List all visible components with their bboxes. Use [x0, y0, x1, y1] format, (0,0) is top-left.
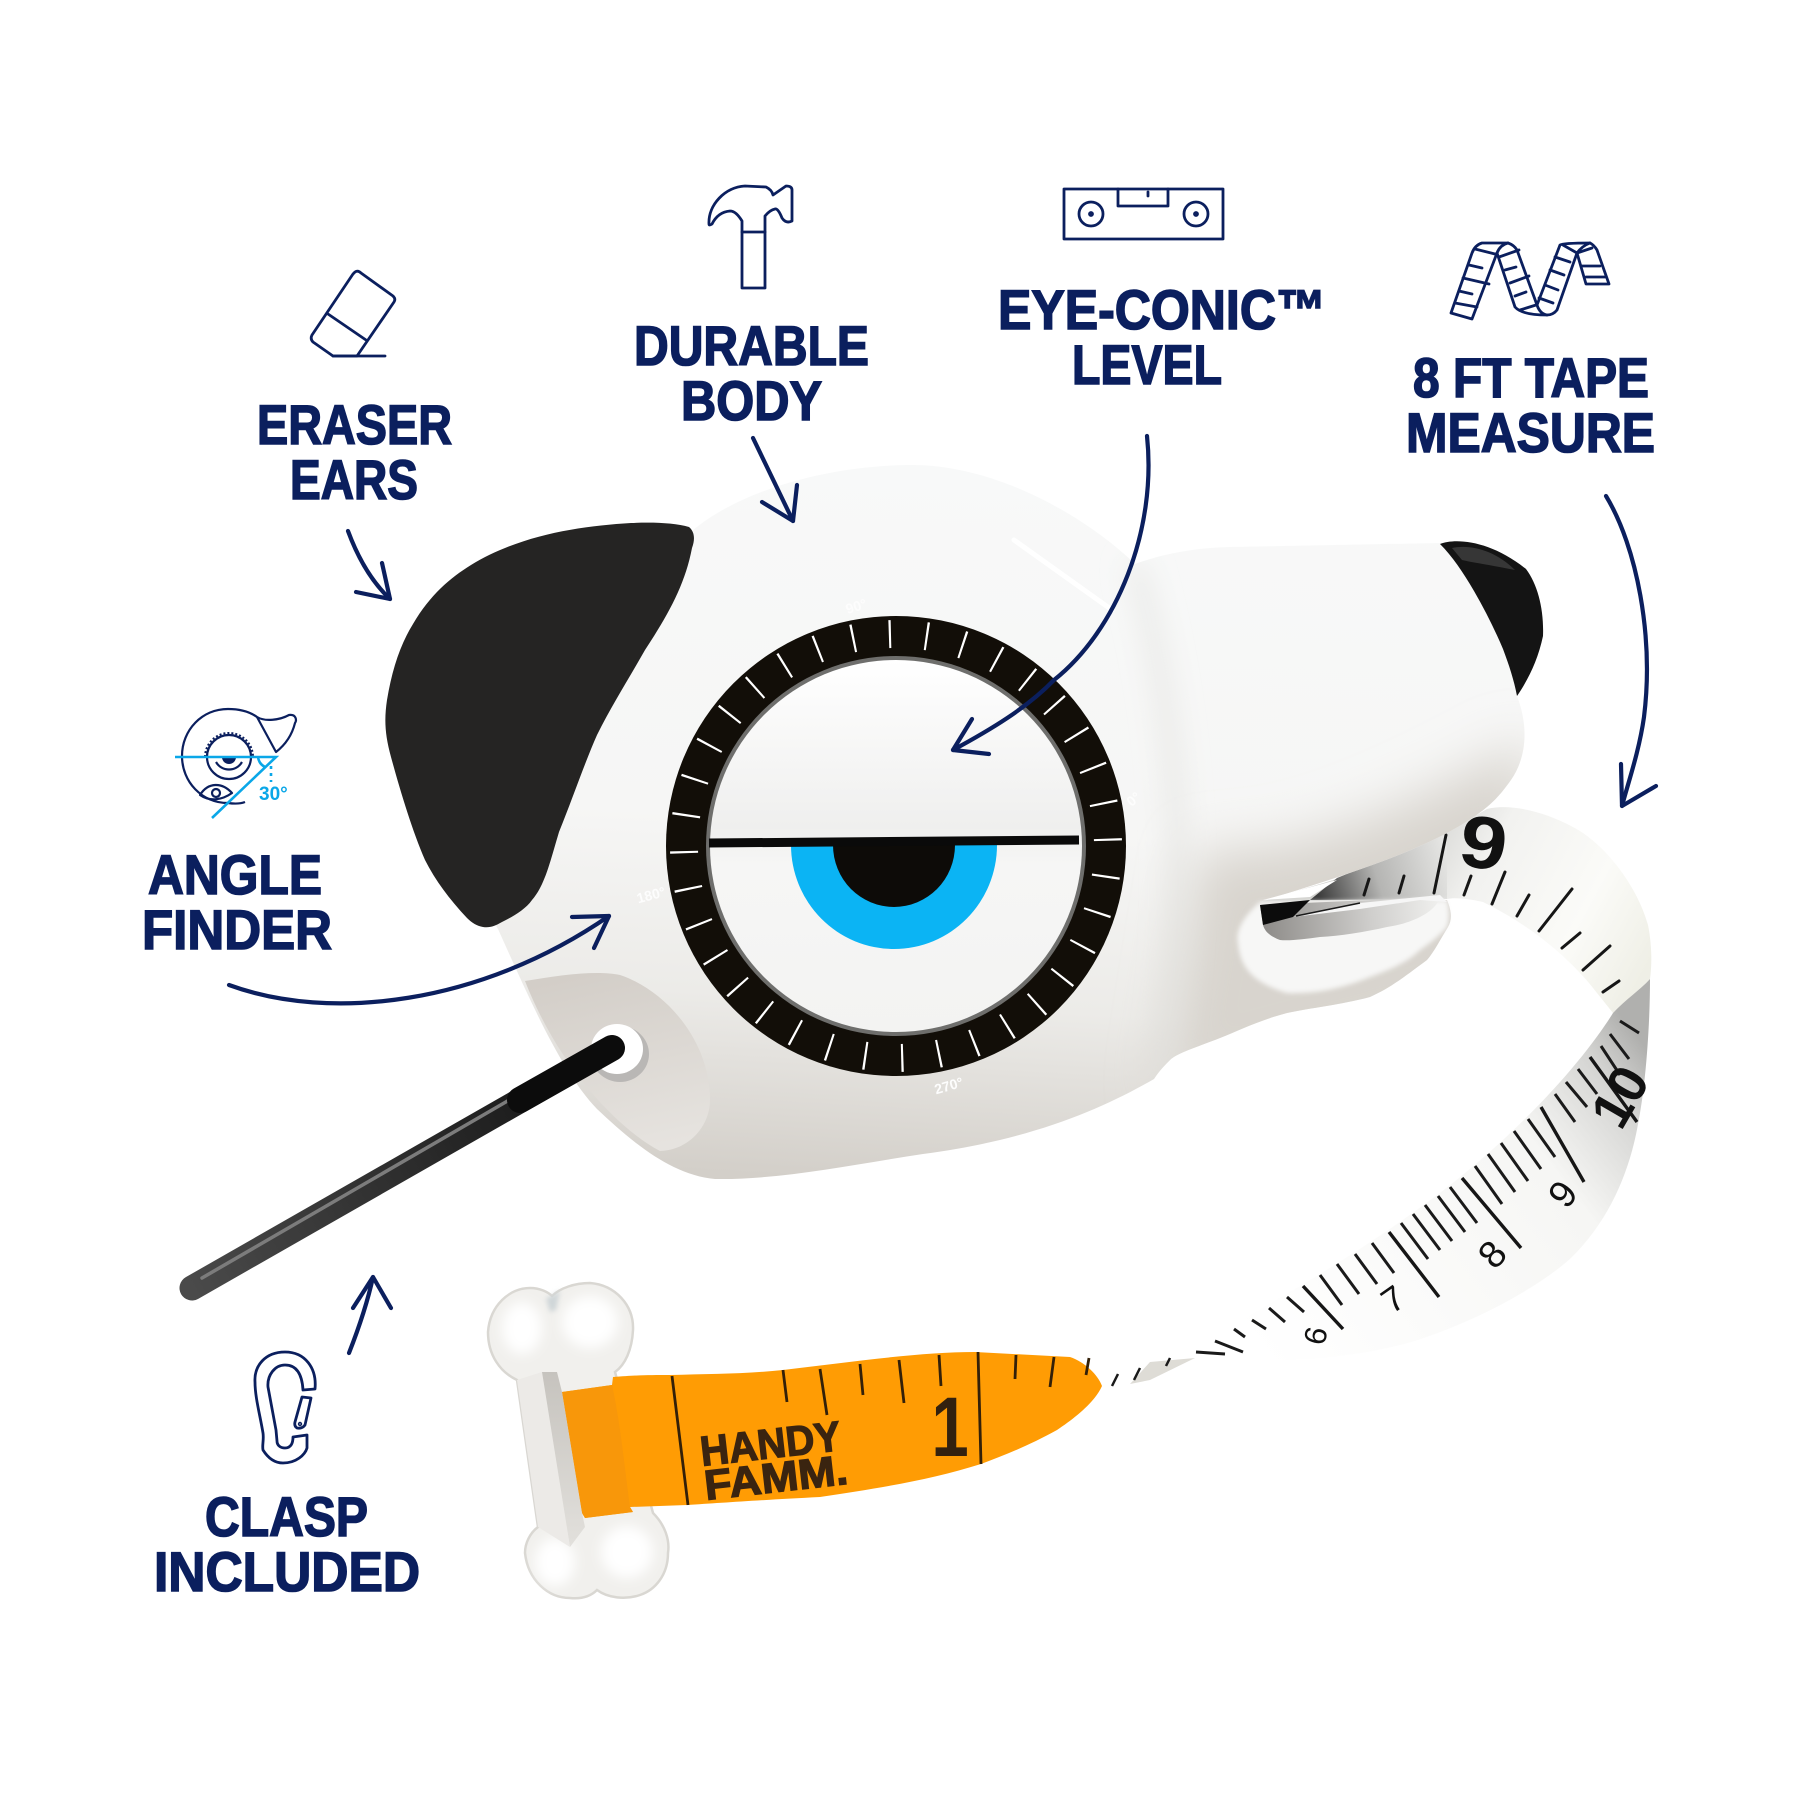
degree labels: 90° [844, 595, 869, 617]
number 9 on tape: 9 [1454, 799, 1513, 887]
pupil [833, 845, 955, 907]
degree labels: 270° [933, 1074, 965, 1097]
tape numbers [1297, 1056, 1661, 1348]
arrow: to tape [1606, 496, 1656, 806]
arrow: to ear [348, 531, 390, 599]
heading: angle finder [142, 843, 332, 961]
heading: durable body: DURABLE [634, 314, 869, 377]
snout highlight [1014, 540, 1112, 610]
heading: eraser ears [257, 393, 452, 511]
heading: 8 ft tape measure: 8 FT TAPE [1413, 346, 1649, 409]
heading: 8 ft tape measure [1406, 346, 1655, 464]
heading: clasp included: INCLUDED [154, 1540, 420, 1603]
arrow: to eye [953, 436, 1149, 754]
Handy Famm logo: FAMM. [702, 1446, 850, 1509]
icon: angle finder: 30° [259, 784, 288, 805]
degree labels: 0° [1123, 789, 1144, 809]
degree labels [635, 595, 1144, 1097]
heading: eraser ears: ERASER [257, 393, 452, 456]
icon: spirit level [1064, 189, 1223, 239]
heading: eye-conic level: EYE-CONIC™ [998, 278, 1326, 341]
tape numbers: 8 [1470, 1233, 1516, 1277]
callout: clasp included [154, 1277, 420, 1603]
tape numbers: 10 [1579, 1056, 1661, 1138]
bone tag, silhouette [488, 1283, 668, 1598]
carabiner clasp [192, 1048, 612, 1288]
callout: tape measure [1406, 243, 1656, 806]
tape numbers: 6 [1297, 1324, 1335, 1348]
tape numbers: 9 [1540, 1173, 1587, 1216]
glass eye [706, 656, 1086, 1036]
eyelid line [709, 840, 1079, 843]
Handy Famm logo: HANDY [698, 1412, 843, 1475]
tape numbers: 7 [1374, 1278, 1413, 1321]
dog body and snout [496, 541, 1524, 1179]
eye level dial [635, 595, 1144, 1097]
heading: angle finder: FINDER [142, 898, 332, 961]
arrow: to clasp [349, 1277, 391, 1353]
bone tag, front bar [517, 1372, 585, 1547]
tape measure, lower band [1096, 979, 1661, 1395]
callout: angle finder [142, 709, 609, 1003]
clasp recess [525, 973, 710, 1151]
heading: angle finder: ANGLE [148, 843, 322, 906]
heading: eye-conic level [998, 278, 1326, 396]
heading: durable body: BODY [681, 369, 822, 432]
icon: carabiner [255, 1352, 315, 1463]
heading: eye-conic level: LEVEL [1072, 333, 1222, 396]
jaw rim [1237, 900, 1449, 993]
eraser ear [385, 523, 694, 927]
icon: angle finder [175, 709, 296, 818]
clasp hole [591, 1024, 649, 1082]
heading: clasp included [154, 1485, 420, 1603]
angle scale ring [666, 616, 1126, 1076]
callout: durable body [634, 186, 869, 521]
mouth opening [1260, 880, 1447, 940]
icon: hammer [709, 186, 792, 288]
arrow: to angle scale [229, 916, 609, 1003]
orange tape tab [562, 1352, 1102, 1518]
heading: clasp included: CLASP [205, 1485, 368, 1548]
callout: eraser ears [257, 271, 452, 599]
Handy Famm logo [698, 1412, 850, 1509]
iris [791, 845, 997, 949]
icon: measuring tape [1451, 243, 1609, 319]
degree labels: 180° [635, 883, 667, 906]
dog nose [1440, 541, 1543, 696]
heading: durable body [634, 314, 869, 432]
arrow: to body [753, 438, 797, 521]
heading: eraser ears: EARS [290, 448, 418, 511]
tape measure, upper loop [1260, 799, 1651, 1013]
callout: eye-conic level [953, 189, 1326, 754]
icon: eraser [311, 271, 395, 356]
tab numeral 1: 1 [931, 1381, 969, 1475]
heading: 8 ft tape measure: MEASURE [1406, 401, 1655, 464]
